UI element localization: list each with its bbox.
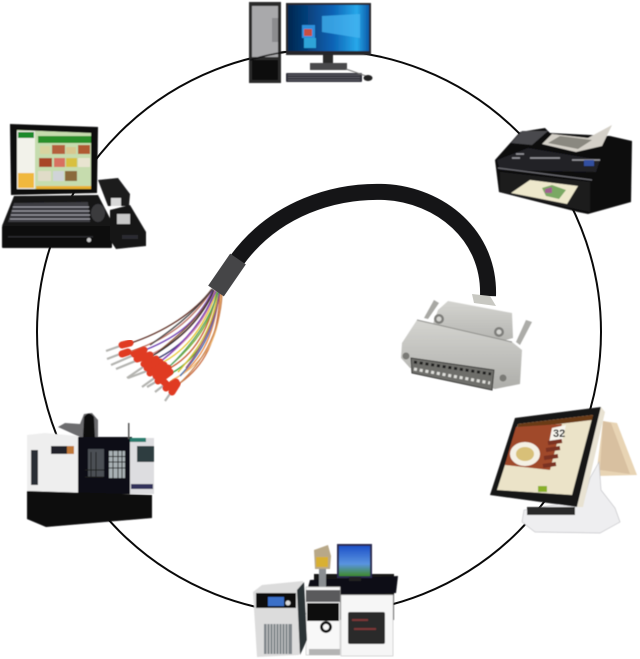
crimp terminals [106,343,177,401]
icon: multifunction printer [495,125,632,214]
icon: dual-screen touch POS [490,407,637,533]
cable assembly [106,192,532,401]
icon: laser marking machine [253,544,398,657]
icon: desktop computer [249,2,372,83]
black jacket [237,192,488,296]
connection ring [37,50,601,614]
icon: dual-screen touch POS: 32 [553,428,565,440]
icon: CNC machining center [27,413,154,527]
D-sub connector [401,300,532,390]
strain relief [472,294,496,306]
loose colored wires [126,289,222,387]
heat-shrink sleeve [216,259,238,291]
icon: POS terminal with cash drawer [2,124,146,249]
